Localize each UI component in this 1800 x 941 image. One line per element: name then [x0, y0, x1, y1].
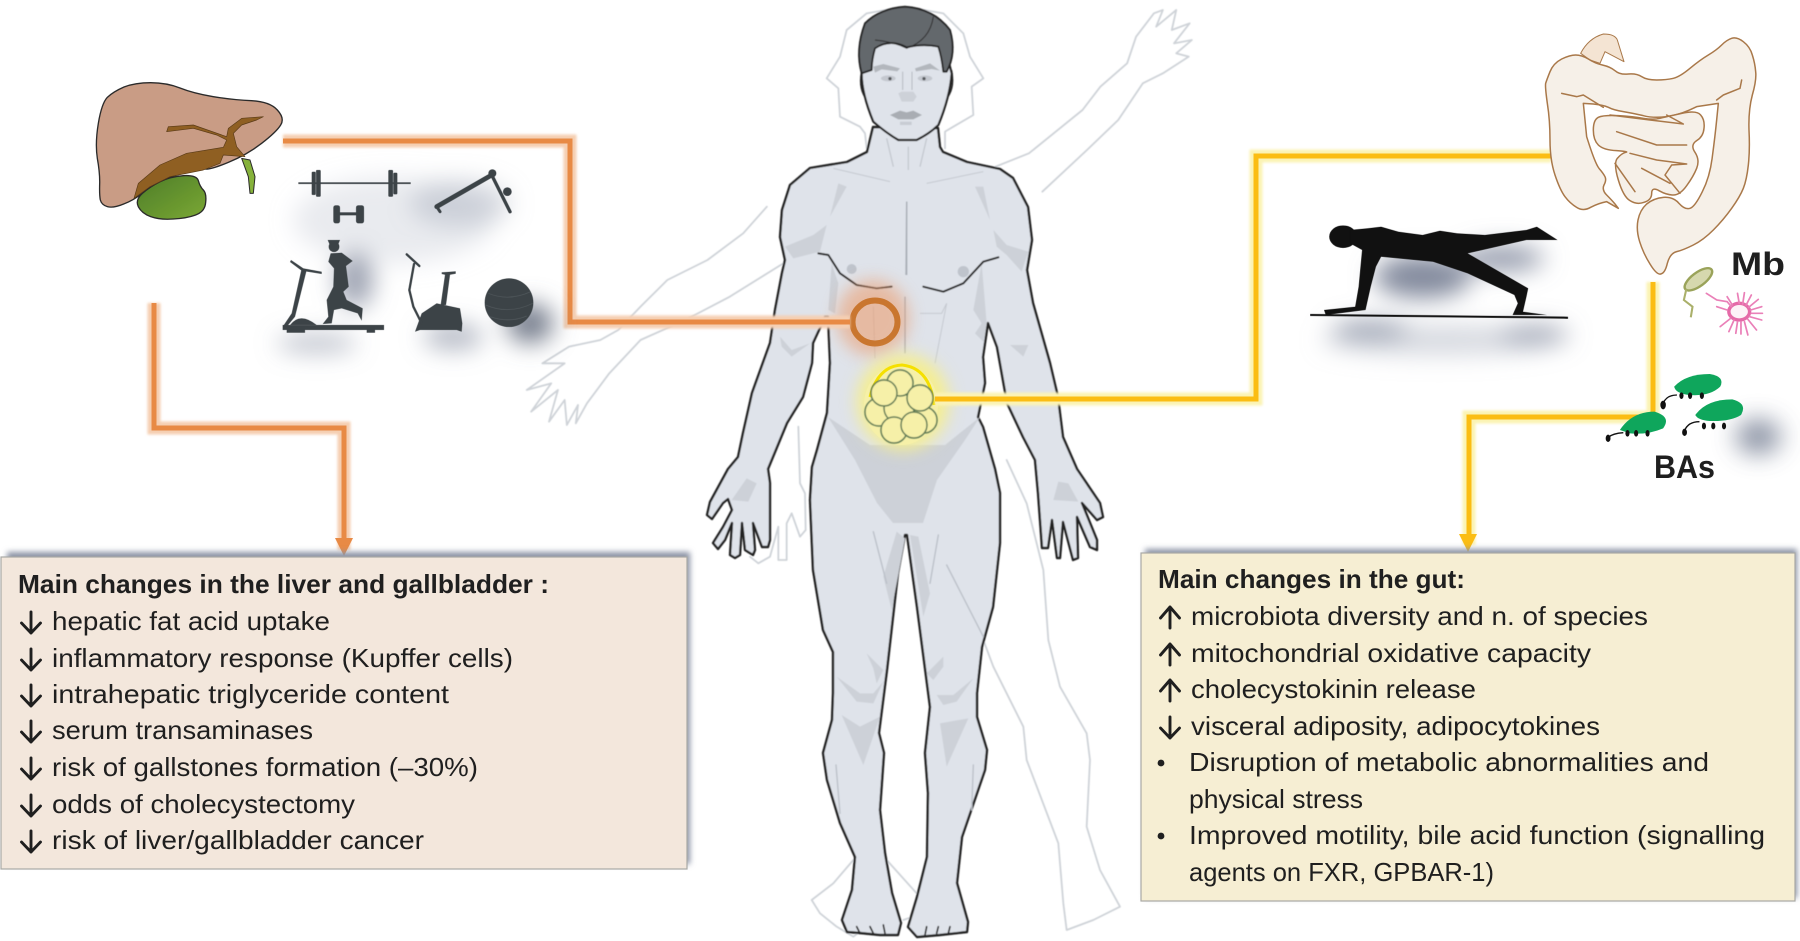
eyebrows and eyes	[873, 63, 940, 73]
list: gut changes: cholecystokinin release	[1191, 674, 1476, 704]
list: liver changes: odds of cholecystectomy	[52, 789, 355, 819]
icon: intestines	[1546, 34, 1756, 274]
icons: microbiota bacteria	[1681, 264, 1762, 335]
connector: intestine to gut panel with arrow (yellow)	[1459, 282, 1653, 552]
molecule shadow	[1736, 418, 1781, 455]
list: gut changes: Improved motility, bile acid function (signalling	[1189, 820, 1765, 850]
human body figure	[527, 7, 1192, 937]
connector: liver to liver panel with arrow (orange)	[154, 303, 353, 556]
icons: bile acid molecules	[1606, 374, 1781, 455]
label: Mb: Mb	[1731, 246, 1785, 282]
list: liver changes: inflammatory response (Kupffer cells)	[52, 643, 513, 673]
connector: liver to body ring (orange)	[283, 141, 850, 322]
list: gut changes	[1158, 601, 1765, 887]
highlight: visceral fat cluster	[857, 354, 949, 450]
label: BAs: BAs	[1654, 449, 1715, 485]
incline bench	[437, 175, 510, 212]
icon: liver and gallbladder	[96, 83, 282, 219]
icon: plank exercise silhouette	[1310, 225, 1568, 355]
list: gut changes: Disruption of metabolic abnormalities and	[1189, 747, 1709, 777]
exercise ball	[485, 278, 533, 327]
pink bacterium	[1706, 293, 1762, 335]
list: liver changes: intrahepatic triglyceride content	[52, 679, 450, 709]
treadmill with runner	[283, 240, 384, 333]
list: liver changes	[22, 606, 513, 855]
plank shadow	[1322, 245, 1568, 355]
head	[859, 7, 953, 170]
ghost outline: moved pose	[527, 7, 1192, 937]
highlight: liver region with ring	[837, 280, 909, 356]
nose and mouth	[898, 92, 917, 102]
list: gut changes: visceral adiposity, adipocytokines	[1191, 711, 1600, 741]
heading: gut panel: Main changes in the gut:	[1158, 564, 1465, 594]
list: liver changes: risk of gallstones formation (–30%)	[52, 752, 478, 782]
barbell and dumbbell	[298, 170, 411, 223]
body muscle shading	[732, 168, 1078, 935]
list: liver changes: hepatic fat acid uptake	[52, 606, 330, 636]
list: gut changes: agents on FXR, GPBAR-1)	[1189, 857, 1494, 887]
list: gut changes: microbiota diversity and n. of species	[1191, 601, 1648, 631]
list: gut changes: mitochondrial oxidative capacity	[1191, 638, 1591, 668]
list: liver changes: serum transaminases	[52, 715, 313, 745]
body silhouette	[707, 127, 1103, 937]
hair	[859, 7, 953, 73]
panel: gut changes	[1141, 549, 1797, 901]
heading: liver panel: Main changes in the liver and gallbladder :	[18, 569, 549, 599]
panel: liver and gallbladder changes	[1, 552, 690, 869]
equipment shadows	[277, 177, 553, 353]
list: liver changes: risk of liver/gallbladder cancer	[52, 825, 424, 855]
exercise bike	[415, 271, 462, 332]
list: gut changes: physical stress	[1189, 784, 1363, 814]
icons: gym equipment	[277, 169, 553, 353]
green rod bacterium	[1681, 264, 1716, 317]
connector: fat to intestine (yellow)	[935, 156, 1551, 399]
